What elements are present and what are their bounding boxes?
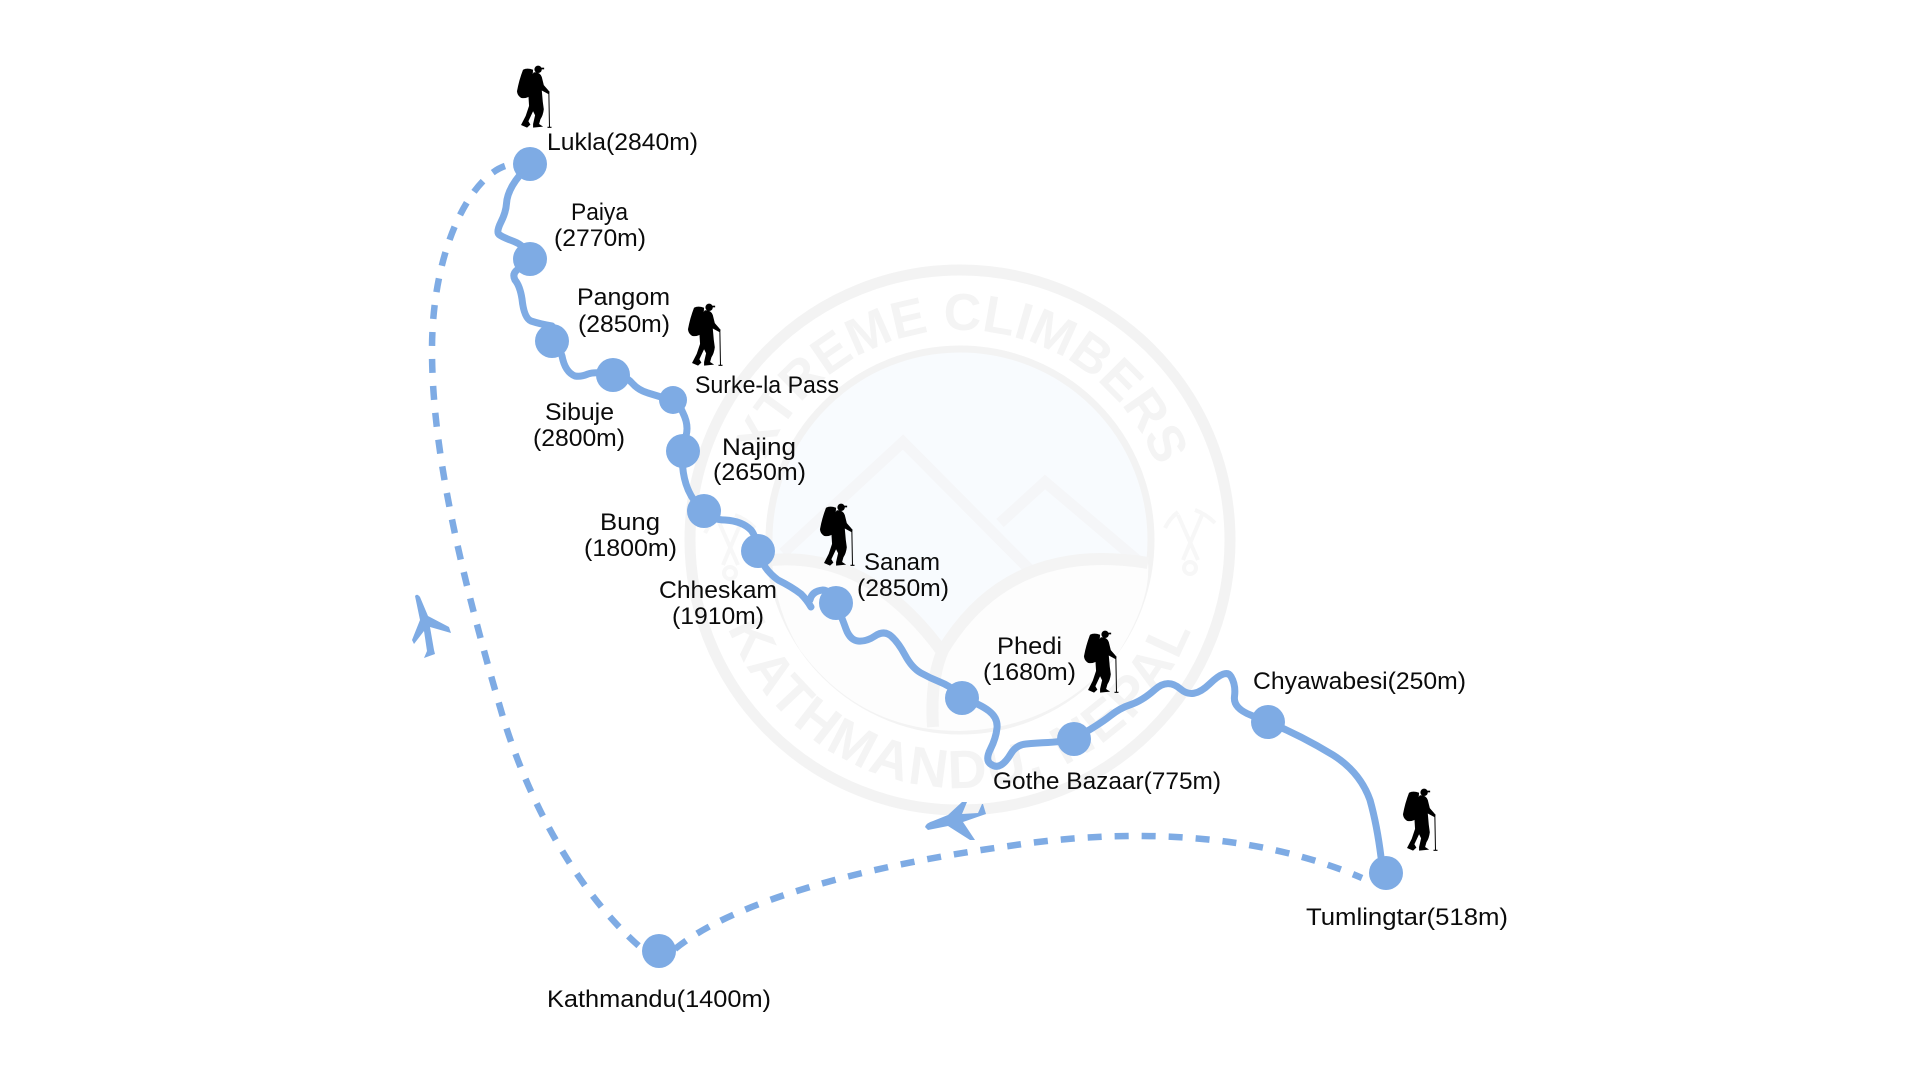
label: Sanam xyxy=(857,549,949,602)
stop: Najing xyxy=(666,434,700,468)
watermark left ice axes xyxy=(705,515,755,579)
stop: Chyawabesi xyxy=(1251,705,1285,739)
stop: Kathmandu xyxy=(642,934,676,968)
label: Sibuje: Sibuje xyxy=(545,399,614,426)
label: Phedi xyxy=(983,633,1076,686)
stop: Chheskam xyxy=(741,534,775,568)
label: Pangom xyxy=(577,284,670,338)
icon: plane left xyxy=(412,595,451,658)
trekking route xyxy=(498,164,1386,873)
label: Chheskam xyxy=(659,577,777,630)
label: Phedi: (1680m) xyxy=(983,659,1076,686)
label: Bung: (1800m) xyxy=(584,535,677,562)
label: Paiya: Paiya xyxy=(571,199,629,226)
icon: hiker at Phedi xyxy=(1084,631,1119,693)
stop: Gothe Bazaar xyxy=(1057,722,1091,756)
label: Pangom: Pangom xyxy=(577,284,670,311)
label: Chyawabesi: Chyawabesi(250m) xyxy=(1253,668,1466,695)
stop: Lukla xyxy=(513,147,547,181)
label: Surke-la Pass: Surke-la Pass xyxy=(695,372,839,399)
icon: plane bottom xyxy=(925,802,986,840)
label: Najing: Najing xyxy=(722,434,796,461)
label: Paiya xyxy=(554,199,646,252)
stop: Sanam xyxy=(819,586,853,620)
stop: Paiya xyxy=(513,242,547,276)
label: Paiya: (2770m) xyxy=(554,225,646,252)
label: Gothe Bazaar: Gothe Bazaar(775m) xyxy=(993,768,1221,795)
label: Chheskam: Chheskam xyxy=(659,577,777,604)
stop: Tumlingtar xyxy=(1369,856,1403,890)
stop: Phedi xyxy=(945,681,979,715)
label: Kathmandu: Kathmandu(1400m) xyxy=(547,986,771,1013)
icon: hiker at Lukla xyxy=(517,66,552,128)
watermark right ice axes xyxy=(1165,510,1215,574)
watermark top text: XTREME CLIMBERS xyxy=(734,294,1186,461)
stop: Bung xyxy=(687,494,721,528)
flight route: Kathmandu to Tumlingtar xyxy=(675,836,1362,949)
label: Pangom: (2850m) xyxy=(578,311,670,338)
label: Bung xyxy=(584,509,677,562)
watermark hills xyxy=(772,559,1148,727)
label: Najing: (2650m) xyxy=(713,459,806,486)
watermark lower hills fill xyxy=(772,559,1148,731)
label: Sanam: (2850m) xyxy=(857,575,949,602)
route stops xyxy=(513,147,1403,968)
watermark bottom text: KATHMANDU, NEPAL xyxy=(729,616,1190,788)
watermark outer ring xyxy=(690,270,1230,810)
icon: hiker at Tumlingtar xyxy=(1403,789,1438,851)
label: Lukla: Lukla(2840m) xyxy=(547,129,698,156)
label: Bung: Bung xyxy=(600,509,660,536)
watermark logo xyxy=(684,264,1236,815)
stop: Surke-la Pass xyxy=(659,386,687,414)
label: Sanam: Sanam xyxy=(864,549,940,576)
flight route: Lukla to Kathmandu xyxy=(432,166,640,947)
label: Sibuje xyxy=(533,399,625,452)
label: Najing xyxy=(713,434,806,486)
icon: hiker at Surke-la xyxy=(688,304,723,366)
stop: Sibuje xyxy=(596,358,630,392)
label: Phedi: Phedi xyxy=(997,633,1062,660)
label: Sibuje: (2800m) xyxy=(533,425,625,452)
label: Tumlingtar: Tumlingtar(518m) xyxy=(1306,904,1508,931)
stop: Pangom xyxy=(535,324,569,358)
watermark inner disc xyxy=(769,349,1151,731)
icon: hiker at Sanam xyxy=(820,504,855,566)
label: Chheskam: (1910m) xyxy=(672,603,764,630)
watermark mountains xyxy=(783,442,1137,570)
